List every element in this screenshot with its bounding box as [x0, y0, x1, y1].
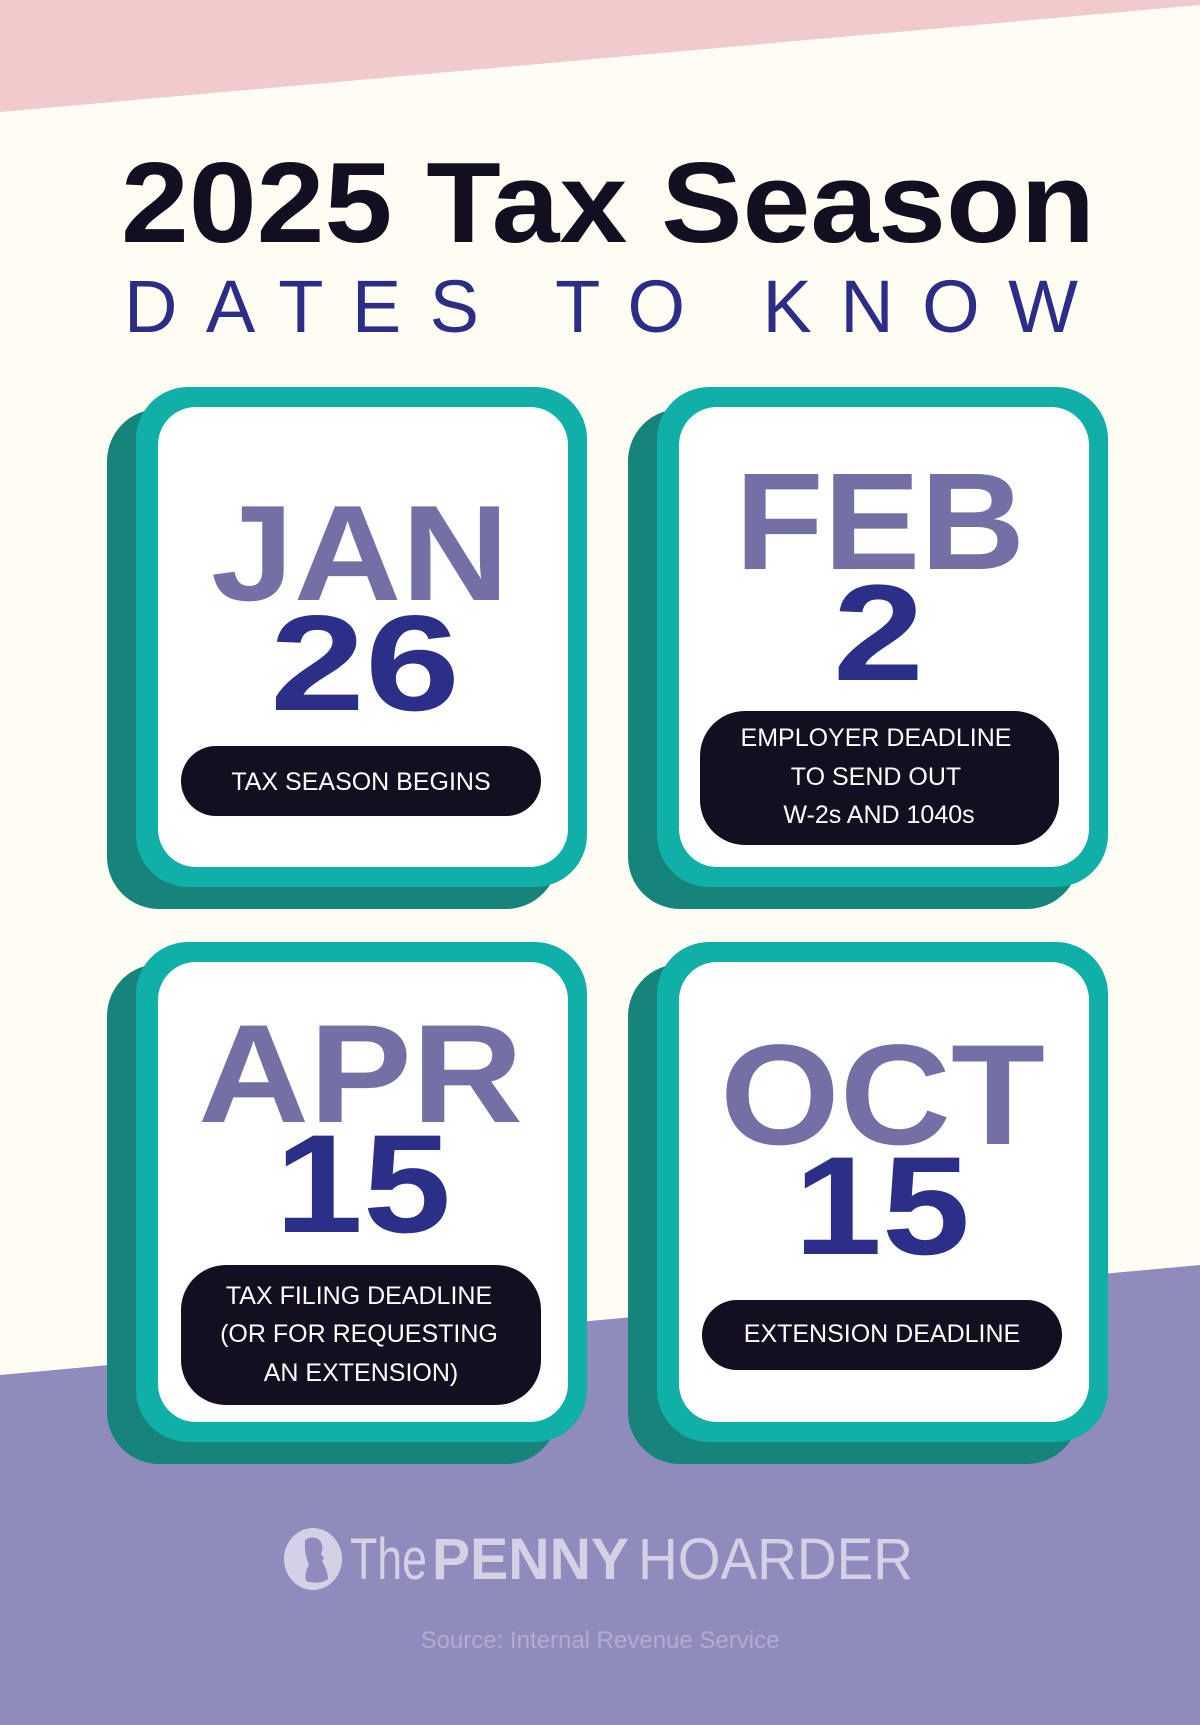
subtitle: DATES TO KNOW	[124, 265, 1078, 348]
month: apr: APR	[198, 995, 523, 1152]
pill: tax filing deadline: (OR FOR REQUESTING	[220, 1320, 498, 1348]
day: 15: 15	[794, 1127, 970, 1284]
source: Source: Internal Revenue Service	[421, 1627, 779, 1654]
day: 2: 2	[833, 557, 924, 710]
pill: employer deadline: EMPLOYER DEADLINE	[741, 724, 1011, 752]
pill: extension deadline	[702, 1300, 1062, 1370]
pill: employer deadline	[700, 711, 1059, 845]
month: jan: JAN	[211, 477, 509, 629]
icon: penny portrait	[284, 1528, 342, 1590]
day: 15: 15	[275, 1105, 451, 1262]
logo: HOARDER	[638, 1527, 913, 1592]
pill: tax season begins: TAX SEASON BEGINS	[231, 768, 491, 796]
card: apr 15	[107, 942, 587, 1464]
card: oct 15	[628, 942, 1108, 1464]
logo: PENNY	[432, 1527, 629, 1592]
card: jan 26	[107, 387, 587, 909]
pill: employer deadline: W-2s AND 1040s	[783, 801, 975, 829]
pill: tax season begins	[181, 746, 541, 816]
title: 2025 Tax Season	[121, 140, 1095, 267]
month: feb: FEB	[735, 445, 1025, 599]
pill: tax filing deadline	[181, 1265, 541, 1405]
day: 26: 26	[270, 587, 460, 739]
pill: extension deadline: EXTENSION DEADLINE	[744, 1320, 1020, 1348]
month: oct: OCT	[720, 1016, 1045, 1175]
pill: tax filing deadline: TAX FILING DEADLINE	[226, 1282, 492, 1310]
card: feb 2	[628, 387, 1108, 909]
pill: tax filing deadline: AN EXTENSION)	[264, 1359, 458, 1387]
pill: employer deadline: TO SEND OUT	[791, 763, 961, 791]
logo	[284, 1527, 913, 1592]
logo: The	[350, 1527, 427, 1592]
